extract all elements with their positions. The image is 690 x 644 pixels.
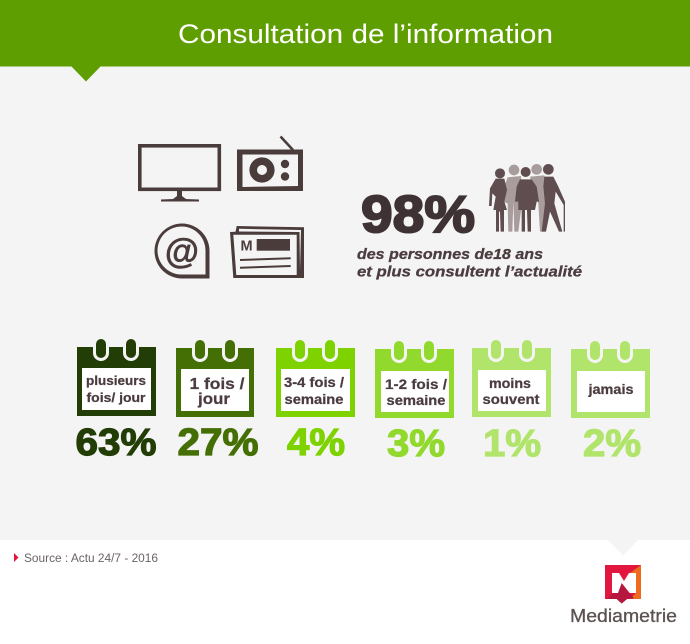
icon: group of people (489, 164, 565, 232)
calendar: moins souvent (472, 338, 551, 465)
calendar: moins souvent: souvent (482, 392, 540, 407)
calendar: 3-4 fois par semaine (276, 338, 355, 464)
calendar: plusieurs fois par jour: fois/ jour (86, 390, 146, 405)
header banner (0, 0, 690, 82)
calendar: 1 fois par jour: jour (197, 391, 230, 408)
calendar: 3-4 fois par semaine: 4% (287, 422, 345, 464)
Mediametrie logo (570, 565, 677, 626)
description text: et plus consultent l’actualité (357, 264, 582, 280)
calendar: 1 fois par jour (176, 338, 258, 464)
calendar: 1-2 fois par semaine (375, 339, 454, 465)
calendar: plusieurs fois par jour (76, 337, 156, 464)
calendar: 3-4 fois par semaine: semaine (284, 392, 344, 407)
big statistic 98%: 98% (361, 186, 475, 244)
description text (357, 246, 582, 280)
calendar: jamais (571, 339, 650, 465)
icon: at sign bubble (155, 224, 210, 278)
calendar: moins souvent: 1% (483, 423, 541, 465)
calendar: 1-2 fois par semaine: semaine (386, 393, 446, 408)
title: Consultation de l’information (178, 19, 553, 49)
footer notch (608, 540, 638, 556)
icon: radio (237, 136, 303, 191)
calendar: jamais: jamais (587, 382, 634, 397)
icon: at sign bubble: @ (165, 232, 199, 271)
light figures (499, 164, 550, 232)
description text: des personnes de18 ans (357, 246, 543, 263)
icon: newspaper (230, 226, 304, 278)
calendar: 1 fois par jour: 1 fois / (190, 376, 245, 393)
calendar: plusieurs fois par jour: plusieurs (86, 373, 146, 388)
calendar: jamais: 2% (583, 423, 641, 465)
calendar: 1-2 fois par semaine: 3% (387, 423, 445, 465)
calendar: 1 fois par jour: 27% (178, 422, 258, 464)
calendar: 1-2 fois par semaine: 1-2 fois / (385, 377, 447, 392)
calendar: 3-4 fois par semaine: 3-4 fois / (284, 375, 344, 390)
calendar: moins souvent: moins (489, 376, 531, 391)
source note: Source : Actu 24/7 - 2016 (24, 553, 158, 565)
Mediametrie logo: Mediametrie (570, 606, 677, 626)
dark figures (489, 164, 565, 232)
icon: newspaper: M (240, 239, 253, 255)
icon: television (140, 146, 219, 202)
calendar: plusieurs fois par jour: 63% (76, 422, 156, 464)
